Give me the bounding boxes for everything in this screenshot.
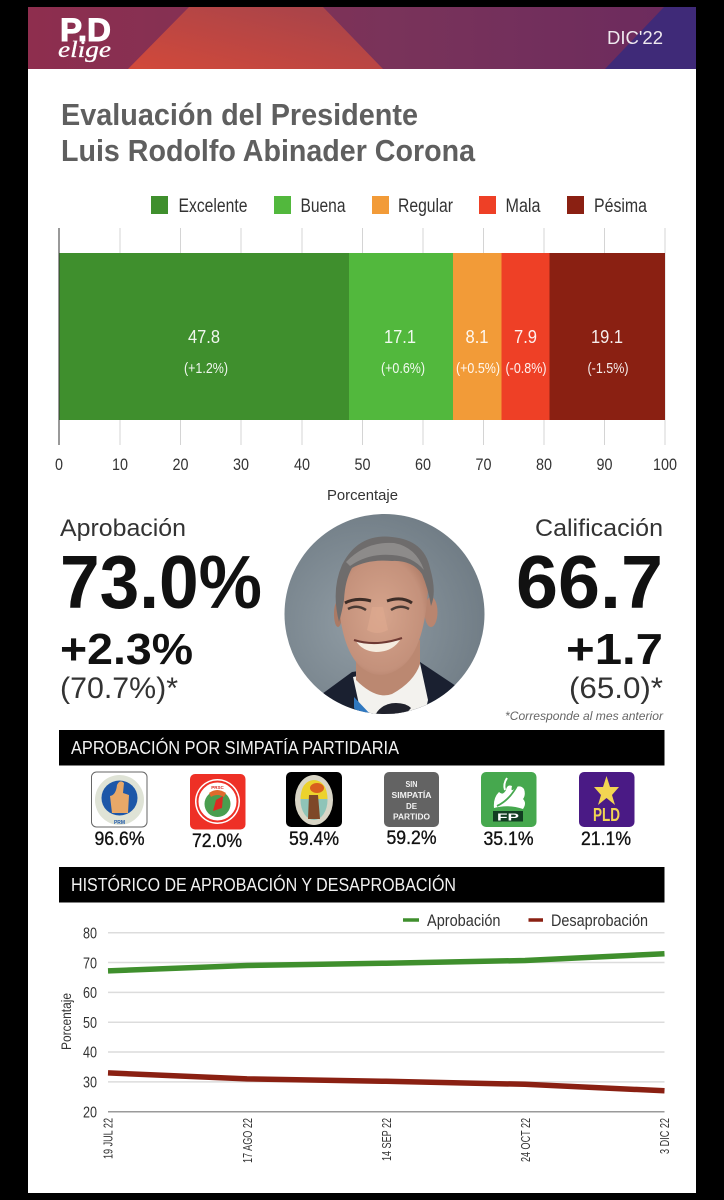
shirt	[353, 663, 428, 718]
bar values: 19.1	[591, 327, 623, 347]
tie	[376, 703, 411, 714]
y axis labels: 20	[83, 1104, 97, 1122]
x axis labels: 30	[233, 456, 249, 474]
x axis labels: 100	[653, 456, 677, 474]
party percentages: 59.2%	[386, 828, 437, 849]
section heading: party approval: APROBACIÓN POR SIMPATÍA PARTIDARIA	[71, 737, 399, 758]
x axis title: Porcentaje	[327, 487, 398, 504]
icon: PLD: PLD	[593, 805, 620, 825]
face	[340, 560, 428, 672]
bar values: 7.9	[514, 327, 537, 347]
icon: sin simpatía de partido: PARTIDO	[393, 812, 430, 822]
date labels	[102, 1118, 672, 1163]
logo: PD elige	[58, 12, 111, 62]
portrait of the president	[284, 514, 485, 720]
chart legend: Desaprobación	[551, 911, 648, 930]
eyebrows	[345, 599, 371, 603]
disapproval line	[108, 1073, 664, 1091]
rating block: (65.0)*	[569, 672, 663, 705]
legend: evaluation categories: Regular	[398, 196, 454, 217]
bar values: (+0.6%)	[381, 360, 425, 377]
y axis labels	[83, 926, 97, 1122]
bar values: (-0.8%)	[506, 360, 546, 377]
approval block: +2.3%	[60, 625, 193, 674]
icon: sin simpatía de partido: SIMPATÍA	[392, 791, 432, 800]
approval block: Aprobación	[60, 515, 186, 542]
icon: sin simpatía de partido: DE	[406, 802, 418, 811]
y axis title: Porcentaje	[58, 993, 74, 1050]
x axis labels	[55, 456, 677, 474]
approval block: (70.7%)*	[60, 672, 178, 705]
legend: evaluation categories	[151, 196, 647, 217]
y axis labels: 60	[83, 985, 97, 1002]
x axis labels: 10	[112, 456, 128, 474]
legend: evaluation categories: Pésima	[594, 196, 647, 217]
title	[61, 97, 476, 168]
rating block: 66.7	[516, 540, 663, 624]
mouth	[356, 640, 400, 652]
y axis labels: 50	[83, 1015, 97, 1032]
bar segments	[59, 253, 665, 420]
hair	[336, 537, 434, 622]
stacked bar chart	[55, 228, 677, 504]
title: Luis Rodolfo Abinader Corona	[61, 133, 476, 168]
party approval row	[92, 772, 634, 852]
x axis labels: 50	[354, 456, 370, 474]
icon: torch emblem	[286, 772, 342, 827]
rating block	[505, 515, 664, 723]
x axis labels: 80	[536, 456, 552, 474]
line chart: approval history	[58, 911, 672, 1163]
party percentages: 59.4%	[289, 829, 339, 850]
bar values: (-1.5%)	[588, 360, 628, 377]
date labels: 3 DIC 22	[658, 1118, 672, 1154]
icon: sin simpatía de partido	[384, 772, 439, 827]
bar values: (+0.5%)	[456, 360, 500, 377]
bar values	[184, 327, 628, 377]
eyes	[348, 607, 366, 610]
bar values: 17.1	[384, 327, 416, 347]
header banner	[28, 7, 696, 69]
section heading: history: HISTÓRICO DE APROBACIÓN Y DESAPROBACIÓN	[71, 874, 456, 895]
ears	[424, 597, 438, 627]
y axis labels: 30	[83, 1074, 97, 1092]
approval block	[60, 515, 262, 705]
approval line	[108, 954, 664, 971]
icon: PRSC	[190, 774, 246, 830]
y axis labels: 70	[83, 956, 97, 972]
legend: evaluation categories: Mala	[506, 196, 541, 217]
x axis labels: 70	[476, 456, 492, 474]
icon: FP	[481, 772, 536, 827]
icon: PRM: PRM	[114, 820, 125, 826]
legend: evaluation categories: Excelente	[178, 196, 248, 217]
suit	[323, 662, 455, 714]
title: Evaluación del Presidente	[61, 97, 418, 132]
date labels: 14 SEP 22	[380, 1118, 394, 1161]
footnote: *Corresponde al mes anterior	[505, 711, 664, 723]
section heading: history	[59, 867, 664, 902]
legend: evaluation categories: Buena	[300, 196, 346, 217]
bar values: (+1.2%)	[184, 360, 228, 377]
icon: PLD	[579, 772, 634, 827]
icon: sin simpatía de partido: SIN	[406, 780, 418, 789]
bar values: 8.1	[466, 327, 488, 347]
rating block: +1.7	[566, 625, 663, 674]
nose	[367, 607, 388, 633]
y axis labels: 40	[83, 1044, 97, 1062]
logo: PD elige: elige	[58, 37, 111, 62]
section heading: party approval	[59, 730, 664, 766]
date label: DIC'22	[607, 28, 663, 48]
party percentages: 96.6%	[94, 829, 145, 850]
icon: PRM	[92, 772, 147, 827]
party percentages: 72.0%	[192, 831, 242, 852]
icon: PRSC: PRSC	[211, 785, 224, 790]
party percentages	[94, 828, 631, 852]
approval block: 73.0%	[60, 540, 262, 624]
logo: PD elige: P.D	[60, 12, 111, 48]
party percentages: 35.1%	[484, 829, 534, 850]
rating block: Calificación	[535, 515, 663, 542]
y axis labels: 80	[83, 926, 97, 942]
date labels: 19 JUL 22	[102, 1118, 116, 1159]
bar values: 47.8	[188, 327, 220, 347]
chart legend: Aprobación	[427, 911, 500, 930]
x axis labels: 40	[294, 456, 310, 474]
date labels: 17 AGO 22	[241, 1118, 255, 1163]
icon: FP: FP	[497, 812, 520, 824]
date labels: 24 OCT 22	[519, 1118, 533, 1162]
neck	[356, 640, 420, 695]
x axis labels: 90	[596, 456, 612, 474]
x axis labels: 0	[55, 456, 63, 474]
party percentages: 21.1%	[581, 829, 631, 850]
x axis labels: 60	[415, 456, 431, 474]
chart legend	[403, 911, 648, 930]
x axis labels: 20	[172, 456, 188, 474]
